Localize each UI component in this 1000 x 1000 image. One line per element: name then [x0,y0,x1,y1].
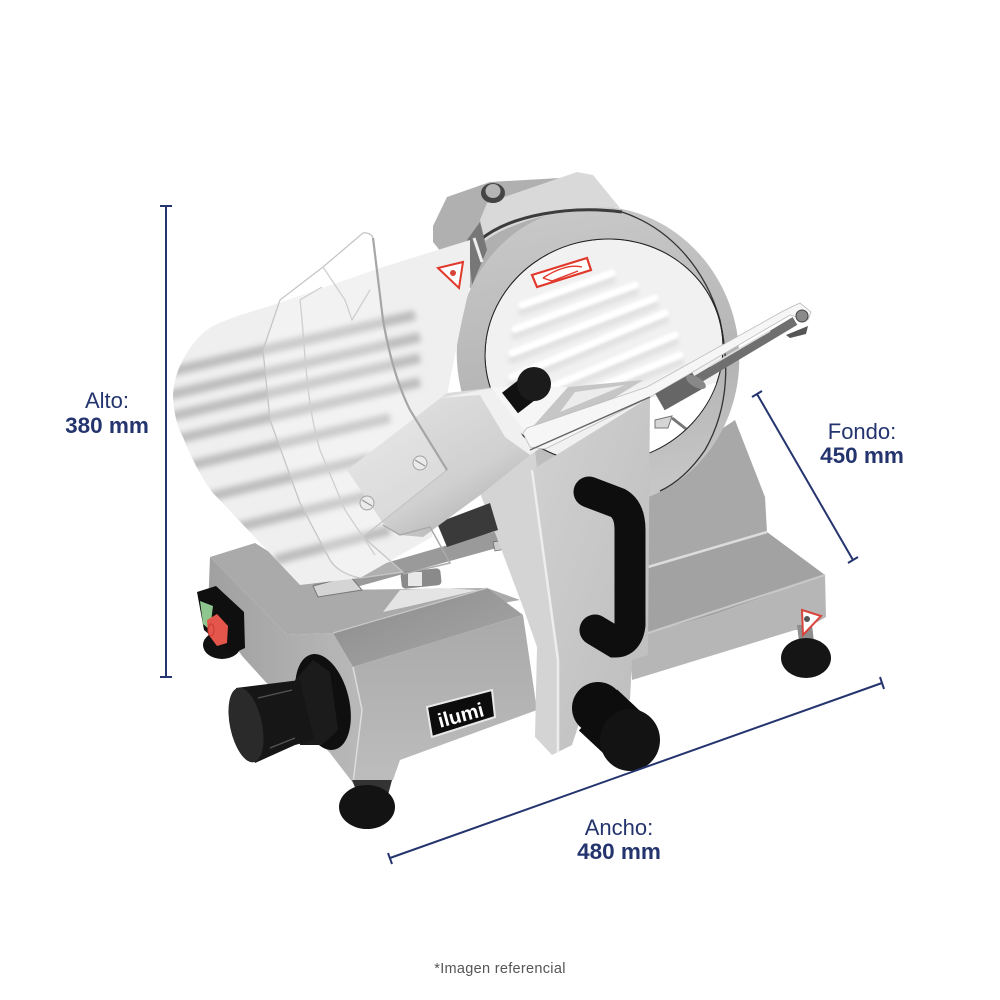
label: alto [65,388,149,438]
rear housing [433,178,640,300]
power switch [197,586,245,659]
footnote: *Imagen referencial [434,961,566,977]
label: alto: 380 mm [65,413,149,438]
label: alto: Alto: [85,388,129,413]
top cap with knob [467,172,622,285]
dimension: alto [65,206,172,677]
brand plate: ilumi [436,699,486,733]
label: ancho: Ancho: [585,815,653,840]
warning label: base [802,610,821,635]
label: fondo [820,419,904,468]
bottom cylinder knob [572,682,660,771]
label: fondo: Fondo: [828,419,896,444]
rear base [630,420,831,680]
front foot [339,780,395,829]
tray ribs [165,315,420,560]
dimension: ancho [388,677,884,864]
rear foot [781,625,831,678]
dimension: fondo [752,391,904,563]
pusher arm and rod [523,303,811,450]
blade guard ring [433,184,763,528]
hand rest block [347,388,545,537]
carrying handle [589,492,630,642]
carriage rail and mount [313,530,506,597]
black grip [510,367,551,403]
label: ancho: 480 mm [577,839,661,864]
transparent guard [263,233,450,578]
front left base [197,543,537,829]
central pillar [437,397,650,755]
warning label: blade [532,258,591,287]
block screws [360,456,427,510]
brand plate [427,690,495,737]
slicer machine [165,172,831,829]
warning label: tray [438,262,463,288]
infographic: slicer with dimensions [66,172,902,976]
food tray [165,240,470,585]
speed knob [222,648,360,765]
chrome wedge behind arm [490,380,643,433]
label: ancho [577,815,661,864]
label: fondo: 450 mm [820,443,904,468]
blade plate [486,240,722,455]
